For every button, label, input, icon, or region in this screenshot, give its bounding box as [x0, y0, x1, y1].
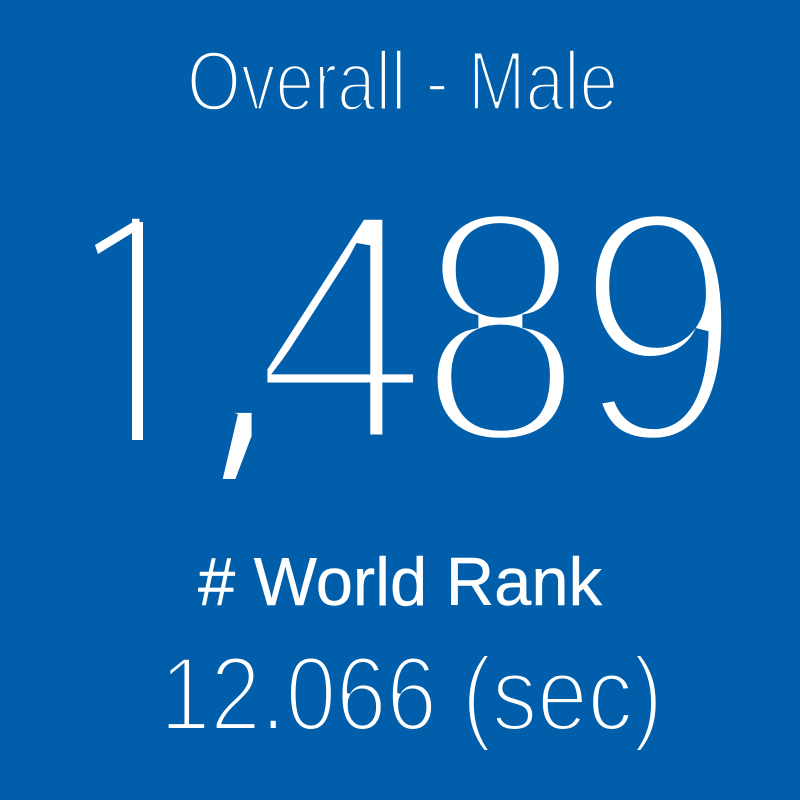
big number: 1 — [56, 141, 201, 513]
time value: 12.066 (sec) — [160, 636, 663, 753]
big number: 4 — [253, 141, 429, 514]
big number: 9 — [575, 140, 742, 513]
title: Overall - Male — [187, 34, 618, 128]
big number — [56, 140, 742, 514]
big number: , — [207, 193, 271, 513]
big number: 8 — [418, 140, 583, 513]
metric label: # World Rank — [198, 544, 603, 620]
